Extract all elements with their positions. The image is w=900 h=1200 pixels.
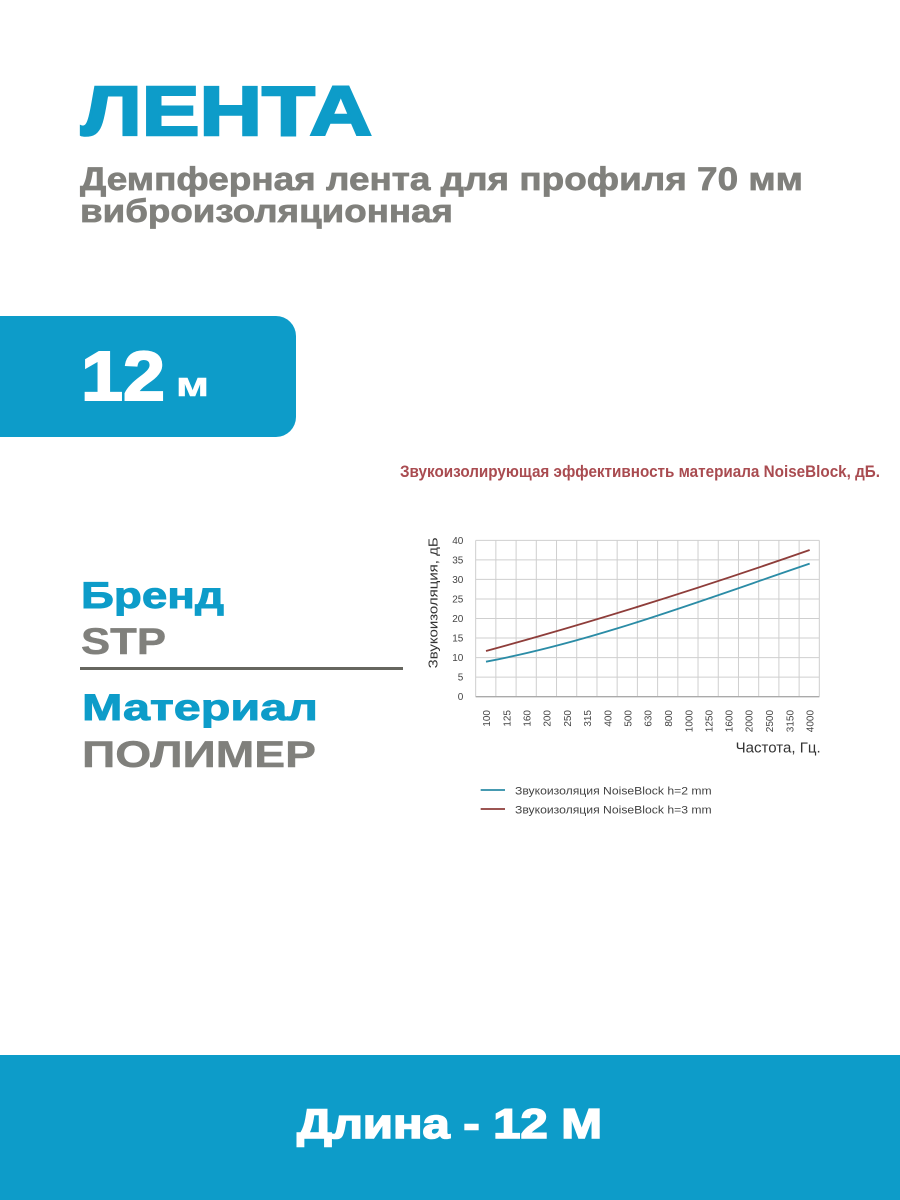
- x axis labels: 4000: [806, 710, 817, 732]
- x axis labels: 3150: [785, 710, 796, 732]
- x axis labels: 160: [523, 710, 534, 727]
- x axis labels: 100: [482, 710, 493, 727]
- x axis labels: 200: [543, 710, 554, 727]
- x axis labels: 315: [583, 710, 594, 727]
- badge: length 12 m: м: [176, 366, 209, 404]
- legend: Звукоизоляция NoiseBlock h=3 mm: [515, 805, 712, 817]
- x axis labels: 400: [603, 710, 614, 727]
- spec: brand: STP: [81, 621, 166, 662]
- spec: brand: [81, 575, 224, 662]
- footer band: Длина - 12 М: [297, 1100, 602, 1147]
- badge: length 12 m: 12: [81, 337, 165, 415]
- divider line: [80, 667, 403, 670]
- legend: [481, 785, 712, 817]
- y axis labels: 20: [452, 614, 464, 625]
- subtitle: виброизоляционная: [80, 193, 453, 229]
- title: ЛЕНТА: [81, 72, 372, 150]
- subtitle: [80, 161, 803, 229]
- curve: h=2 mm: [486, 564, 810, 662]
- x axis labels: 2500: [765, 710, 776, 732]
- y axis labels: 40: [452, 536, 464, 547]
- x axis labels: [482, 710, 817, 732]
- spec: brand: Бренд: [81, 575, 224, 616]
- y axis labels: 10: [452, 653, 464, 664]
- y axis labels: 15: [452, 634, 464, 645]
- spec: material: Материал: [82, 687, 318, 728]
- footer band: [0, 1055, 900, 1200]
- line chart: sound insulation: [426, 536, 821, 817]
- x axis labels: 125: [502, 710, 513, 727]
- y axis labels: 5: [458, 673, 464, 684]
- x axis labels: 1600: [725, 710, 736, 732]
- y axis labels: [452, 536, 464, 703]
- curve: h=3 mm: [486, 550, 810, 651]
- x axis title: Частота, Гц.: [736, 740, 821, 756]
- x axis labels: 800: [664, 710, 675, 727]
- y axis labels: 25: [452, 595, 464, 606]
- y axis labels: 30: [452, 575, 464, 586]
- y axis title: Звукоизоляция, дБ: [426, 537, 441, 668]
- x axis labels: 1250: [704, 710, 715, 732]
- x axis labels: 500: [624, 710, 635, 727]
- x axis labels: 1000: [684, 710, 695, 732]
- subtitle: Демпферная лента для профиля 70 мм: [80, 161, 803, 197]
- x axis labels: 2000: [745, 710, 756, 732]
- badge: length 12 m: [0, 316, 296, 437]
- spec: material: ПОЛИМЕР: [82, 734, 316, 775]
- x axis labels: 630: [644, 710, 655, 727]
- x axis labels: 250: [563, 710, 574, 727]
- spec: material: [82, 687, 318, 775]
- y axis labels: 35: [452, 556, 464, 567]
- legend: Звукоизоляция NoiseBlock h=2 mm: [515, 785, 712, 797]
- y axis labels: 0: [458, 692, 464, 703]
